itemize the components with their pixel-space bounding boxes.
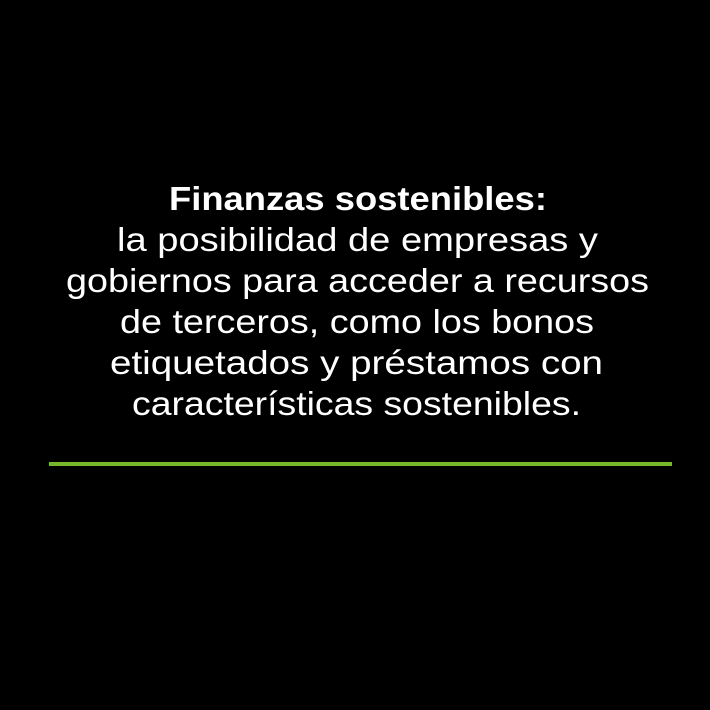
body line 3: de terceros, como los bonos	[120, 303, 594, 340]
text block: definition	[66, 180, 649, 422]
body line 1: la posibilidad de empresas y	[117, 221, 599, 258]
green divider line	[49, 462, 672, 466]
body line 5: características sostenibles.	[132, 385, 581, 422]
body line 4: etiquetados y préstamos con	[110, 344, 603, 381]
body line 2: gobiernos para acceder a recursos	[66, 262, 649, 299]
heading: Finanzas sostenibles:	[169, 180, 547, 217]
